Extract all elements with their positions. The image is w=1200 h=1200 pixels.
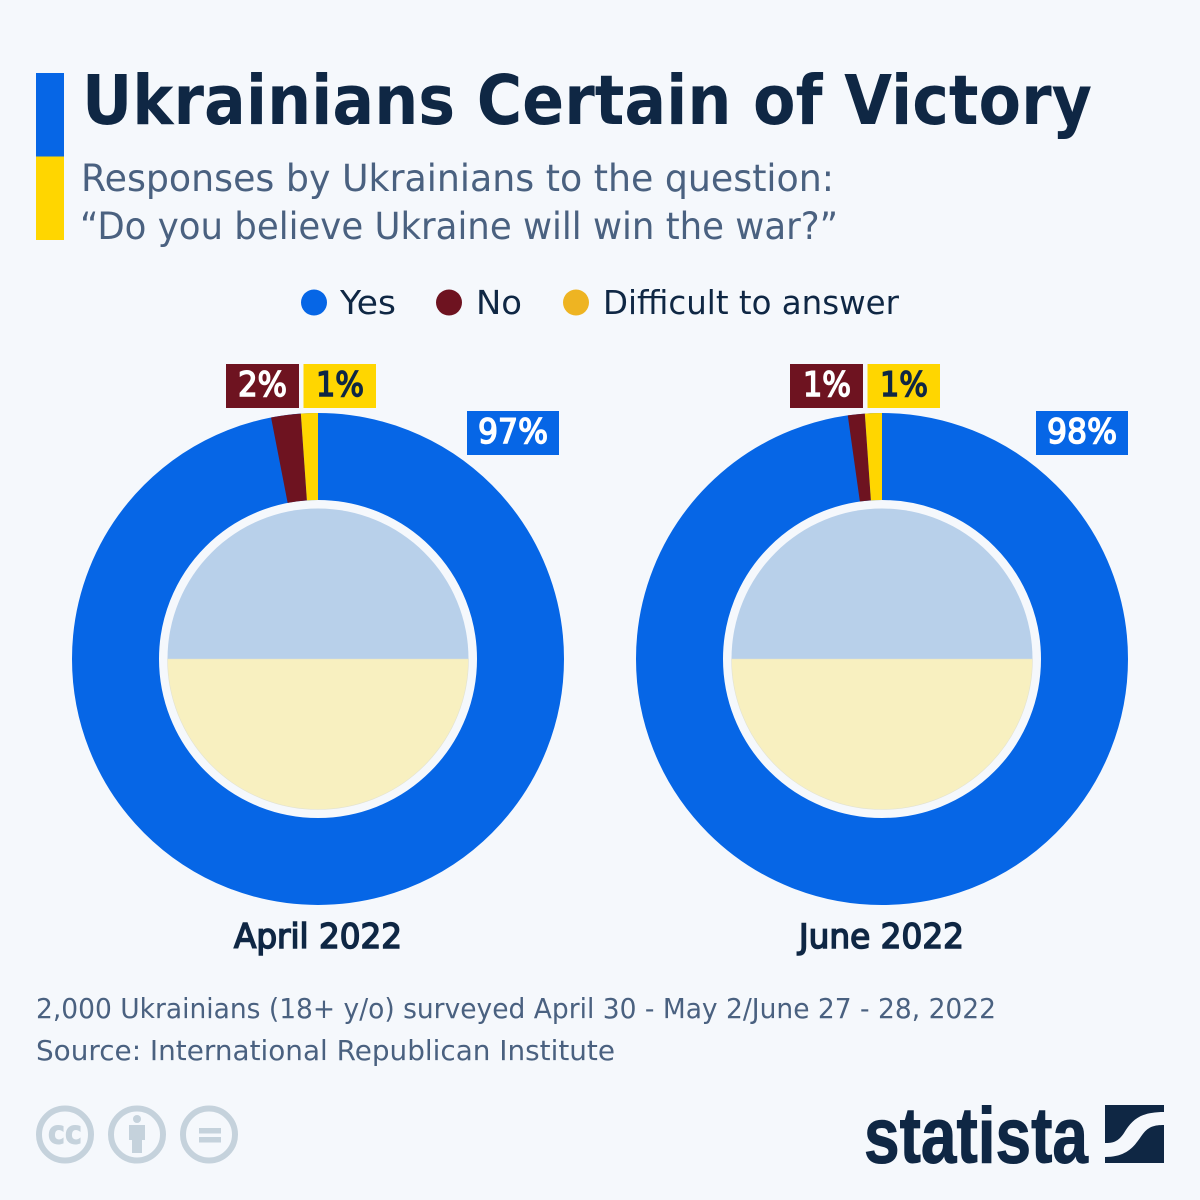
value label: June No 1%: 1% — [803, 365, 851, 405]
logo mark — [1105, 1105, 1164, 1163]
value label: April Difficult 1% — [304, 364, 376, 408]
logo wordmark: statista — [864, 1090, 1089, 1180]
legend item: No — [436, 283, 522, 322]
value label: April Yes 97%: 97% — [478, 412, 548, 452]
segment: Difficult to answer 1% — [865, 413, 882, 500]
legend item: Yes — [301, 283, 396, 322]
footnote and source — [36, 992, 996, 1067]
chart label: April 2022: April 2022 — [234, 917, 402, 957]
value label: April No 2%: 2% — [238, 365, 287, 405]
value label: June Difficult 1% — [868, 364, 940, 408]
icon: no derivatives — [183, 1108, 235, 1160]
segment: Yes 98% — [680, 456, 1084, 862]
statista logo — [864, 1090, 1164, 1180]
donut chart: June 2022 — [680, 413, 1084, 862]
flag circle — [168, 508, 468, 810]
subtitle: Responses by Ukrainians to the question: — [81, 157, 834, 200]
legend item: Yes: Yes — [339, 283, 396, 322]
legend item: Difficult to answer: Difficult to answer — [603, 283, 899, 322]
value label: April No 2% — [226, 364, 299, 408]
value label: June No 1% — [790, 364, 863, 408]
icon: creative commons: cc — [48, 1114, 82, 1152]
licence icons — [39, 1108, 235, 1160]
chart label: June 2022: June 2022 — [797, 917, 964, 957]
segment: Yes 97% — [116, 456, 520, 862]
subtitle — [80, 157, 838, 248]
footnote and source: 2,000 Ukrainians (18+ y/o) surveyed April 30 - May 2/June 27 - 28, 2022 — [36, 992, 996, 1025]
value label: April Difficult 1%: 1% — [316, 365, 364, 405]
segment: No 1% — [848, 414, 871, 502]
subtitle: “Do you believe Ukraine will win the war?” — [80, 205, 838, 248]
title: Ukrainians Certain of Victory — [82, 61, 1092, 141]
icon: attribution — [111, 1108, 163, 1160]
legend — [301, 283, 899, 322]
flag circle — [732, 508, 1032, 810]
segment: No 2% — [271, 414, 307, 503]
footnote and source: Source: International Republican Institute — [36, 1034, 615, 1067]
icon: creative commons — [39, 1108, 91, 1160]
value label: June Difficult 1%: 1% — [880, 365, 928, 405]
donut chart: April 2022 — [116, 413, 520, 862]
flag accent bar — [36, 73, 64, 240]
legend item: No: No — [476, 283, 522, 322]
value label: June Yes 98%: 98% — [1047, 412, 1117, 452]
segment: Difficult to answer 1% — [301, 413, 318, 500]
